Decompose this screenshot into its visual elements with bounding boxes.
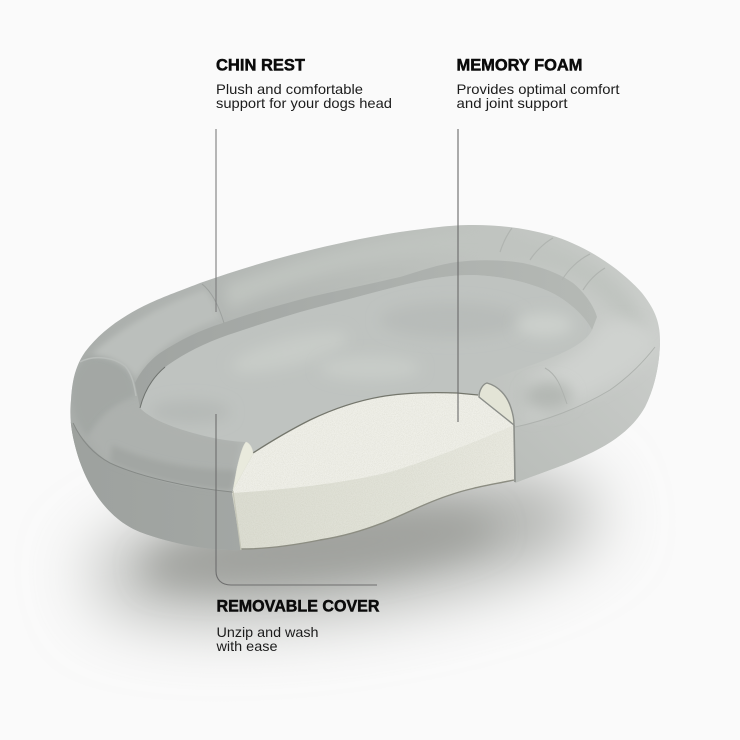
left bolster front highlight (90, 406, 240, 488)
left bolster front underside shade (112, 449, 234, 490)
right bolster highlight (554, 350, 596, 390)
left tube end edge (80, 358, 136, 396)
cushion mottling (176, 316, 566, 415)
callout: chin rest (216, 56, 392, 111)
left cross-section of bolster foam (233, 442, 253, 490)
chin rest panel seam (202, 284, 224, 323)
bed outer silhouette (70, 225, 660, 550)
right seam (515, 347, 655, 427)
bolster shading (70, 261, 660, 550)
heading: CHIN REST (216, 56, 306, 74)
right bolster patch (524, 381, 572, 411)
description: with ease (215, 638, 278, 654)
right cover cut edge (514, 425, 515, 482)
foam front face (232, 425, 514, 549)
cushion floor (140, 275, 592, 453)
description: and joint support (456, 95, 568, 111)
leader line: removable cover (216, 414, 377, 585)
left inner dark crease (140, 367, 165, 408)
back bolster highlight (228, 261, 623, 306)
foam top and front (233, 393, 514, 549)
leader line: chin rest upper (215, 129, 217, 312)
right panel seam (545, 368, 567, 404)
foam texture (234, 394, 514, 548)
left cover cut edge (233, 491, 241, 550)
heading: MEMORY FOAM (456, 56, 582, 74)
right cross-section of bolster foam (479, 383, 514, 425)
left seam (73, 423, 232, 492)
foam core (225, 390, 520, 555)
description: Unzip and wash (216, 624, 318, 640)
back bolster wrinkles (500, 228, 605, 290)
callout: memory foam (456, 56, 620, 111)
heading: REMOVABLE COVER (216, 596, 380, 616)
inner wall band (135, 260, 597, 408)
lower right side band (516, 346, 660, 482)
left end darker tone (71, 361, 132, 424)
dog bed (60, 225, 680, 560)
description: Provides optimal comfort (456, 81, 620, 97)
floor shadow beneath bed (84, 448, 606, 642)
description: support for your dogs head (216, 95, 392, 111)
leader line: memory foam (457, 129, 459, 422)
foam lower edge (241, 480, 514, 549)
lower left side band (70, 422, 240, 550)
left bolster top highlight (96, 294, 216, 374)
description: Plush and comfortable (216, 81, 363, 97)
foam upper edge (253, 393, 478, 453)
callout: removable cover (215, 596, 380, 654)
